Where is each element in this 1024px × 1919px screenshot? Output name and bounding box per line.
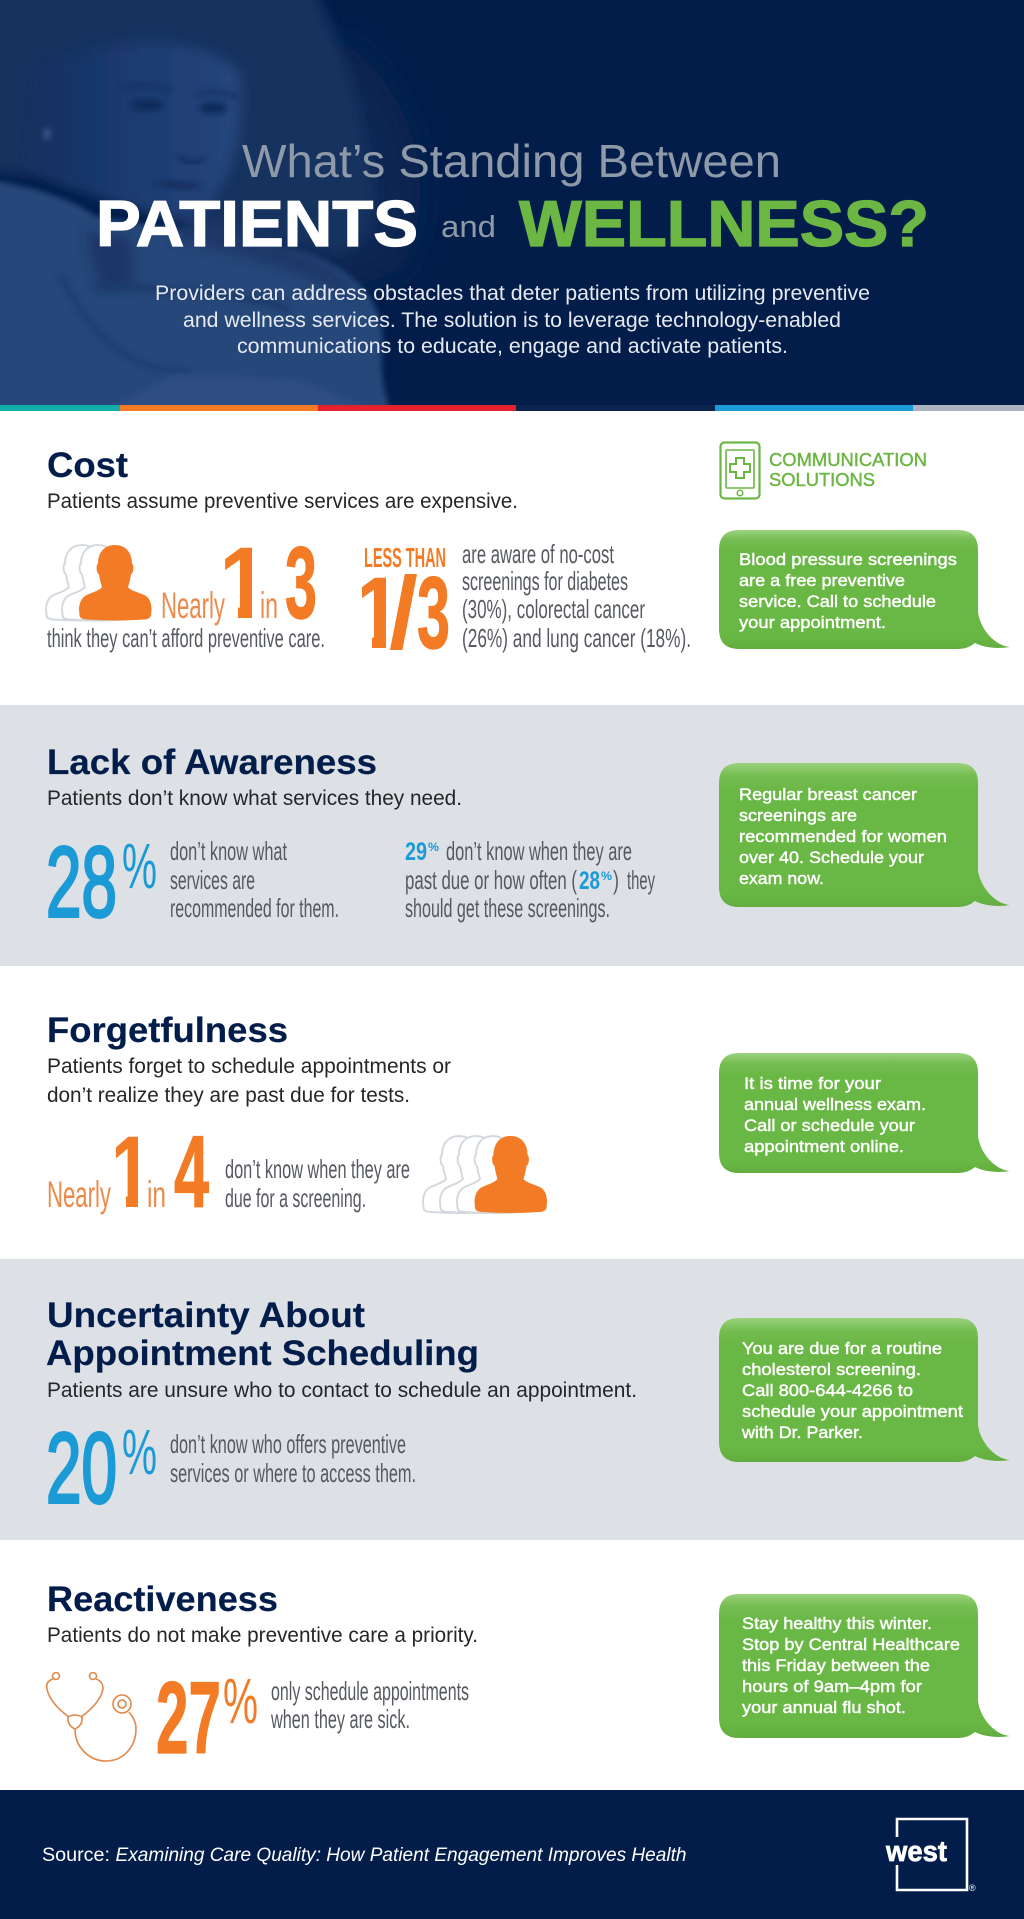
title: PATIENTS: [96, 187, 418, 260]
source line: Examining Care Quality: How Patient Engagement Improves Health: [116, 1845, 686, 1866]
text: only when sick: only schedule appointments: [271, 1676, 469, 1706]
icon: one in four people: [423, 1136, 547, 1213]
icon: phone with medical cross: [720, 442, 760, 498]
stat: nearly 1 in 4: [48, 1136, 209, 1214]
stat: nearly 1 in 4: Nearly: [47, 1174, 111, 1215]
callout: flu shot: this Friday between the: [742, 1656, 930, 1675]
text: due for screening: [225, 1154, 410, 1213]
title: What’s Standing Between: [242, 135, 781, 187]
subheading: forgetfulness: [47, 1055, 451, 1107]
stat: nearly 1 in 3: 1: [219, 526, 269, 640]
stat: nearly 1 in 3: in: [260, 585, 278, 626]
stat: 20 percent: 20: [46, 1412, 117, 1524]
source line: Source:: [42, 1845, 110, 1866]
subheading: uncertainty: Patients are unsure who to contact to schedule an appointment.: [47, 1379, 637, 1402]
stat: less than 1/3: /: [389, 556, 418, 670]
text: services recommended: [170, 836, 339, 923]
text: only when sick: [270, 1676, 469, 1734]
stat: less than 1/3: [362, 548, 448, 650]
text: past due screenings: should get these screenings.: [405, 893, 610, 923]
callout: cholesterol: with Dr. Parker.: [741, 1423, 863, 1442]
panel: uncertainty about appointment scheduling: [0, 1259, 1024, 1540]
callout: blood pressure: [719, 530, 1010, 649]
callout: breast cancer: over 40. Schedule your: [739, 848, 924, 867]
callout: flu shot: your annual flu shot.: [742, 1698, 906, 1717]
stat: nearly 1 in 3: Nearly: [161, 585, 225, 626]
callout: cholesterol: schedule your appointment: [742, 1402, 963, 1421]
stat: less than 1/3: 1: [353, 556, 403, 670]
text: past due screenings: they: [627, 865, 655, 895]
callout: breast cancer: exam now.: [739, 869, 824, 888]
callout: blood pressure: service. Call to schedule: [739, 592, 936, 611]
header panel: [0, 0, 1024, 430]
stat: 27 percent: %: [223, 1665, 258, 1737]
callout: flu shot: Stay healthy this winter.: [742, 1614, 932, 1633]
heading: communication solutions: [769, 449, 927, 490]
subheading: forgetfulness: Patients forget to schedule appointments or: [47, 1055, 451, 1078]
subheading: reactiveness: Patients do not make preventive care a priority.: [47, 1624, 478, 1647]
text: services recommended: services are: [170, 865, 255, 895]
heading: uncertainty: Uncertainty About: [47, 1296, 365, 1335]
stat: less than 1/3: 3: [417, 556, 450, 670]
stat: nearly 1 in 3: 3: [285, 526, 317, 640]
text: who offers services: services or where to access them.: [170, 1458, 416, 1488]
colour stripe: [0, 405, 1024, 411]
caption: afford care: think they can’t afford preventive care.: [47, 623, 325, 653]
stat: nearly 1 in 4: 1: [110, 1115, 152, 1229]
panel: forgetfulness: [48, 1016, 1010, 1214]
logo: west: west: [885, 1836, 947, 1868]
callout: breast cancer: Regular breast cancer: [739, 785, 917, 804]
stat: nearly 1 in 3: [162, 546, 316, 626]
photo: woman resting on her arms: [0, 0, 420, 430]
text: past due screenings: 28: [579, 867, 600, 895]
heading: cost: Cost: [47, 446, 128, 485]
subheading: forgetfulness: don’t realize they are past due for tests.: [47, 1084, 410, 1107]
text: past due screenings: %: [601, 869, 612, 883]
title: [96, 135, 929, 260]
subheading: lack of awareness: Patients don’t know what services they need.: [47, 787, 462, 810]
stat: 20 percent: %: [122, 1416, 157, 1488]
text: past due screenings: 29: [405, 838, 427, 866]
callout: flu shot: [719, 1594, 1010, 1738]
text: who offers services: don’t know who offers preventive: [170, 1429, 406, 1459]
subheading: cost: Patients assume preventive services are expensive.: [47, 490, 518, 513]
heading: reactiveness: Reactiveness: [47, 1580, 278, 1619]
heading: forgetfulness: Forgetfulness: [47, 1011, 288, 1050]
footer: [0, 1790, 1024, 1919]
callout: cholesterol: cholesterol screening.: [742, 1360, 921, 1379]
stat: nearly 1 in 4: 4: [174, 1115, 209, 1229]
intro paragraph: and wellness services. The solution is to leverage technology-enabled: [183, 308, 841, 332]
callout: wellness exam: [719, 1053, 1010, 1173]
callout: cholesterol: [719, 1318, 1010, 1462]
icon: one in three people: [46, 545, 152, 620]
heading: communication solutions: SOLUTIONS: [769, 469, 875, 490]
text: past due screenings: [405, 836, 655, 923]
callout: blood pressure: Blood pressure screenings: [739, 550, 957, 569]
text: past due screenings: %: [428, 840, 439, 854]
callout: wellness exam: annual wellness exam.: [744, 1095, 926, 1114]
text: due for screening: due for a screening.: [225, 1183, 366, 1213]
callout: blood pressure: your appointment.: [739, 613, 886, 632]
stat: 28 percent: %: [122, 830, 157, 902]
callout: breast cancer: recommended for women: [739, 827, 947, 846]
heading: communication solutions: COMMUNICATION: [769, 449, 927, 470]
text: no-cost screenings: are aware of no-cost: [462, 539, 614, 569]
stat: less than 1/3: LESS THAN: [364, 542, 446, 573]
text: no-cost screenings: screenings for diabetes: [462, 566, 628, 596]
logo: west: [885, 1819, 976, 1893]
title: WELLNESS?: [519, 187, 929, 260]
title: and: [441, 209, 496, 244]
panel: lack of awareness: [0, 705, 1024, 966]
intro paragraph: communications to educate, engage and activate patients.: [237, 334, 788, 358]
callout: wellness exam: It is time for your: [744, 1074, 881, 1093]
logo: west: ®: [969, 1883, 976, 1893]
text: no-cost screenings: [462, 539, 691, 653]
callout: cholesterol: You are due for a routine: [742, 1339, 942, 1358]
intro paragraph: Providers can address obstacles that deter patients from utilizing preventive: [155, 281, 870, 305]
callout: breast cancer: [719, 763, 1010, 907]
heading: lack of awareness: Lack of Awareness: [47, 743, 377, 782]
callout: breast cancer: screenings are: [739, 806, 857, 825]
text: past due screenings: don’t know when they are: [446, 836, 632, 866]
callout: wellness exam: Call or schedule your: [744, 1116, 915, 1135]
callout: blood pressure: are a free preventive: [739, 571, 905, 590]
text: no-cost screenings: (30%), colorectal cancer: [462, 594, 645, 624]
text: services recommended: don’t know what: [170, 836, 287, 866]
icon: stethoscope: [47, 1672, 136, 1761]
text: who offers services: [170, 1429, 416, 1488]
callout: cholesterol: Call 800-644-4266 to: [742, 1381, 913, 1400]
text: services recommended: recommended for them.: [170, 893, 339, 923]
text: only when sick: when they are sick.: [270, 1704, 410, 1734]
stat: 27 percent: 27: [156, 1661, 221, 1775]
panel: reactiveness: [0, 1540, 1024, 1790]
callout: flu shot: Stop by Central Healthcare: [742, 1635, 960, 1654]
stat: 28 percent: 28: [46, 826, 117, 938]
heading: uncertainty: [46, 1296, 479, 1373]
panel: cost: [45, 441, 1010, 652]
text: past due screenings: past due or how often (: [405, 865, 577, 895]
heading: uncertainty: Appointment Scheduling: [46, 1334, 479, 1373]
callout: flu shot: hours of 9am–4pm for: [742, 1677, 922, 1696]
text: past due screenings: ): [613, 865, 619, 895]
text: due for screening: don’t know when they are: [225, 1154, 410, 1184]
intro paragraph: [155, 281, 870, 358]
stat: nearly 1 in 4: in: [147, 1174, 166, 1215]
text: no-cost screenings: (26%) and lung cancer (18%).: [462, 623, 691, 653]
callout: wellness exam: appointment online.: [744, 1137, 904, 1156]
